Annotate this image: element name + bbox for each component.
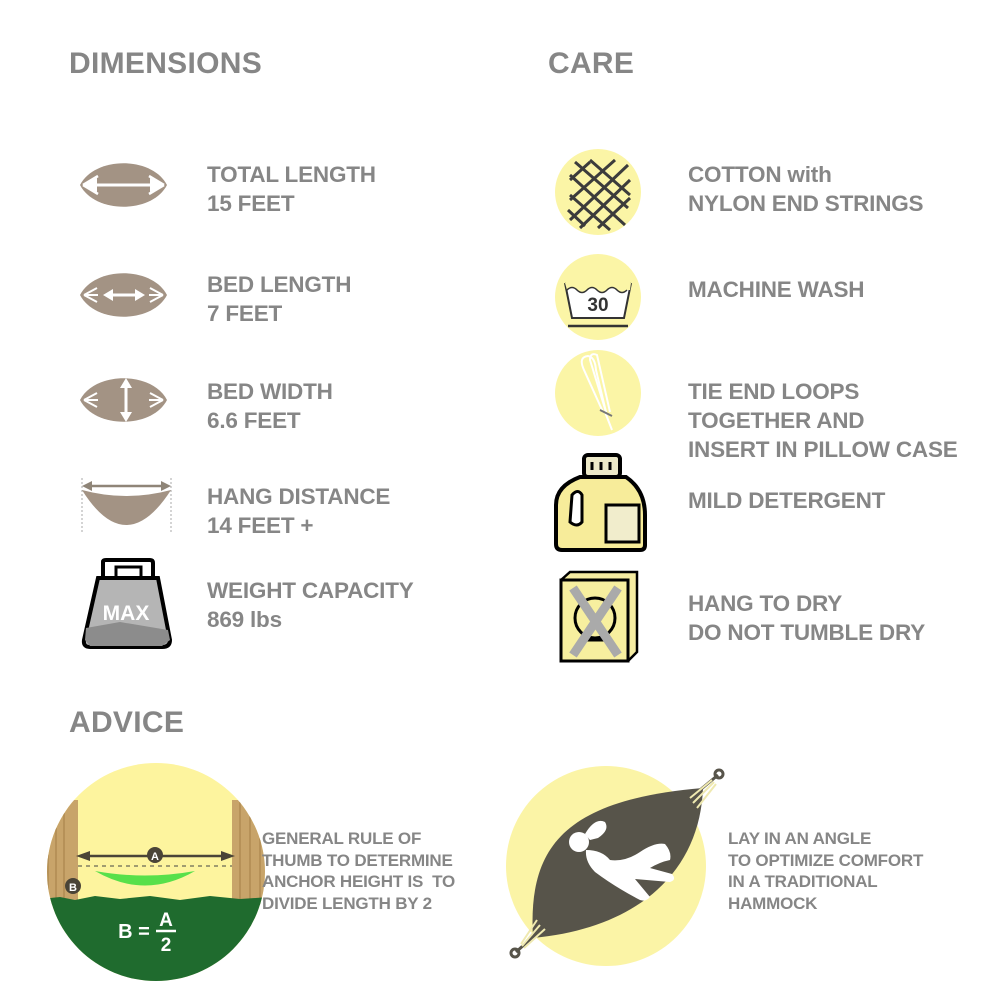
text: hang distance: HANG DISTANCE	[207, 484, 390, 509]
text: bed width	[207, 379, 333, 433]
icon: detergent bottle	[556, 455, 645, 550]
icon: total length	[80, 163, 167, 207]
text: anchor height advice: THUMB TO DETERMINE	[262, 851, 453, 870]
text: total length	[207, 162, 376, 216]
text: anchor height advice: GENERAL RULE OF	[262, 829, 421, 848]
text: hang distance	[207, 484, 390, 538]
text: lay in an angle advice	[728, 829, 924, 913]
illustration: anchor height: A	[151, 851, 159, 863]
text: tie end loops	[688, 379, 958, 462]
heading: dimensions: DIMENSIONS	[69, 47, 262, 80]
text: anchor height advice: DIVIDE LENGTH BY 2	[262, 894, 432, 913]
text: tie end loops: TOGETHER AND	[688, 408, 864, 433]
text: lay in an angle advice: IN A TRADITIONAL	[728, 872, 877, 891]
text: total length: 15 FEET	[207, 191, 294, 216]
text: lay in an angle advice: HAMMOCK	[728, 894, 817, 913]
heading: advice: ADVICE	[69, 706, 184, 739]
text: anchor height advice: ANCHOR HEIGHT IS TO	[262, 872, 455, 891]
text: hang distance: 14 FEET +	[207, 513, 313, 538]
text: tie end loops: TIE END LOOPS	[688, 379, 859, 404]
illustration: anchor height	[47, 763, 265, 981]
icon: machine wash 30: 30	[587, 295, 609, 316]
icon: tie end loops	[555, 350, 641, 436]
text: hang to dry	[688, 591, 925, 645]
text: tie end loops: INSERT IN PILLOW CASE	[688, 437, 958, 462]
text: weight capacity	[207, 578, 414, 632]
graphics layer	[47, 149, 724, 981]
text: cotton: NYLON END STRINGS	[688, 191, 923, 216]
text: mild detergent: MILD DETERGENT	[688, 488, 885, 513]
text: hang to dry: DO NOT TUMBLE DRY	[688, 620, 925, 645]
text: hang to dry: HANG TO DRY	[688, 591, 842, 616]
text: bed length	[207, 272, 351, 326]
icon: hang distance	[82, 478, 171, 532]
icon: no tumble dry	[561, 572, 637, 661]
heading: care: CARE	[548, 47, 634, 80]
icon: bed width	[80, 378, 167, 422]
text: lay in an angle advice: LAY IN AN ANGLE	[728, 829, 871, 848]
icon: bed length	[80, 273, 167, 317]
text: bed width: 6.6 FEET	[207, 408, 300, 433]
text: cotton: COTTON with	[688, 162, 832, 187]
icon: machine wash 30	[555, 254, 641, 340]
text: total length: TOTAL LENGTH	[207, 162, 376, 187]
icon: weight MAX	[84, 560, 170, 647]
illustration: anchor height: B	[69, 882, 77, 894]
text: lay in an angle advice: TO OPTIMIZE COMFORT	[728, 851, 923, 870]
text: weight capacity: 869 lbs	[207, 607, 282, 632]
text: weight capacity: WEIGHT CAPACITY	[207, 578, 414, 603]
icon: cotton net	[555, 149, 641, 235]
text: bed length: 7 FEET	[207, 301, 282, 326]
illustration: anchor height: A	[159, 910, 173, 931]
illustration: anchor height: B =	[118, 921, 150, 943]
text: cotton	[688, 162, 923, 216]
illustration: anchor height: 2	[161, 935, 171, 956]
illustration: lay in an angle	[506, 766, 723, 966]
icon: weight MAX: MAX	[103, 602, 149, 625]
text: bed length: BED LENGTH	[207, 272, 351, 297]
text: machine wash: MACHINE WASH	[688, 277, 864, 302]
text: anchor height advice	[262, 829, 455, 913]
text: bed width: BED WIDTH	[207, 379, 333, 404]
